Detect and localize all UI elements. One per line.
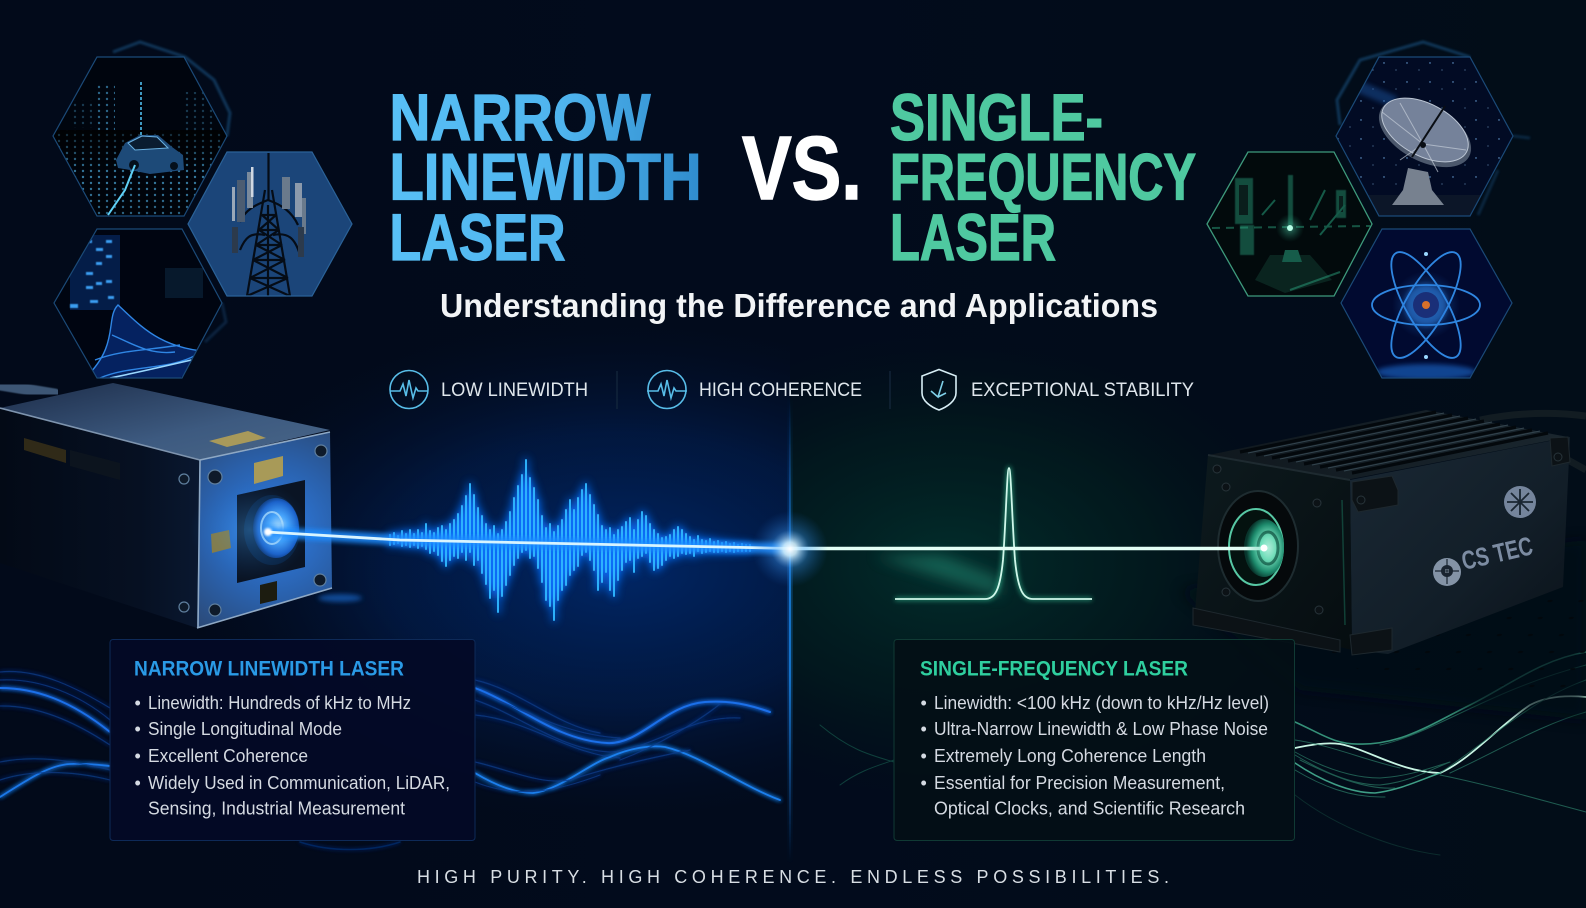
- panel bullet list: Widely Used in Communication, LiDAR,: [148, 773, 450, 793]
- panel bullet list: •: [920, 773, 927, 793]
- title: narrow linewidth laser: LINEWIDTH: [390, 140, 702, 214]
- title: single-frequency laser: LASER: [890, 200, 1056, 274]
- chip: exceptional stability: EXCEPTIONAL STABILITY: [971, 379, 1194, 401]
- panel: single-frequency laser: [894, 640, 1294, 840]
- hexagon: radio telescope: [1334, 55, 1516, 220]
- cable: [0, 385, 55, 394]
- lens: [244, 495, 300, 565]
- green beam: [790, 542, 1264, 555]
- icon: pulse in circle: [390, 370, 428, 408]
- corner blocks: [1193, 437, 1570, 655]
- chart: single-frequency green peak: [874, 468, 1092, 599]
- hexagon cluster: left applications: [50, 42, 354, 380]
- title: narrow linewidth laser: LASER: [390, 200, 566, 274]
- title: narrow linewidth laser: [390, 80, 702, 274]
- title: narrow linewidth laser: NARROW: [390, 80, 651, 154]
- panel bullet list: Excellent Coherence: [148, 746, 308, 766]
- panel bullet list: •: [134, 746, 141, 766]
- right green wave ribbons: [820, 652, 1586, 855]
- hexagon: telecom tower: [186, 150, 354, 298]
- subtitle: Understanding the Difference and Applications: [440, 287, 1158, 324]
- panel bullet list: Sensing, Industrial Measurement: [148, 798, 405, 818]
- footer tagline: HIGH PURITY. HIGH COHERENCE. ENDLESS POSSIBILITIES.: [417, 867, 1169, 887]
- title: single-frequency laser: FREQUENCY: [890, 140, 1196, 214]
- glow outline behind right hexagons: [1337, 42, 1530, 215]
- title: single-frequency laser: [890, 80, 1196, 274]
- panel bullet list: •: [134, 773, 141, 793]
- centre flare: [752, 511, 828, 587]
- front face: [197, 432, 332, 628]
- centre vertical light line: [788, 395, 792, 865]
- rear cable: [1480, 413, 1586, 470]
- panel heading: SINGLE-FREQUENCY LASER: [920, 656, 1188, 680]
- panel bullet list: •: [920, 746, 927, 766]
- device: right green laser module: [1180, 410, 1586, 720]
- front labels: [254, 456, 283, 484]
- left blue wave ribbons: [0, 672, 780, 850]
- panel: narrow linewidth laser: [110, 640, 475, 840]
- panel bullet list: Optical Clocks, and Scientific Research: [934, 798, 1245, 818]
- panel bullet list: •: [134, 719, 141, 739]
- panel bullet list: Extremely Long Coherence Length: [934, 746, 1206, 766]
- panel bullet list: Essential for Precision Measurement,: [934, 773, 1225, 793]
- lens assembly: [1218, 491, 1298, 601]
- bolts: [1213, 453, 1562, 614]
- chip: high coherence: [647, 370, 862, 408]
- panel bullet list: Linewidth: <100 kHz (down to kHz/Hz level): [934, 693, 1269, 713]
- chip: low linewidth: LOW LINEWIDTH: [441, 379, 588, 401]
- icon: shield with check: [922, 370, 956, 410]
- blue beam: [267, 532, 790, 548]
- panel bullet list: Ultra-Narrow Linewidth & Low Phase Noise: [934, 719, 1268, 739]
- top heatsink face: [1209, 410, 1568, 480]
- hexagon: fibre data center: [55, 230, 222, 378]
- front face: [1195, 455, 1352, 650]
- side face: [0, 408, 200, 628]
- brand logo: CS TEC: [1433, 486, 1536, 586]
- chart: noisy blue waveform: [390, 460, 750, 620]
- panel heading: NARROW LINEWIDTH LASER: [134, 656, 404, 680]
- laser beams: [264, 511, 1282, 587]
- panel bullet list: Linewidth: Hundreds of kHz to MHz: [148, 693, 411, 713]
- feature chips row: [390, 370, 1194, 410]
- panel bullet list: •: [920, 693, 927, 713]
- right side face: [1350, 437, 1570, 654]
- hexagon: optics lab: [1205, 150, 1375, 298]
- title: single-frequency laser: SINGLE-: [890, 80, 1103, 154]
- top face: [0, 383, 330, 460]
- icon: pulse in circle: [647, 370, 687, 408]
- brand logo: CS TEC: CS TEC: [1459, 530, 1536, 576]
- hexagon: LiDAR car: [50, 55, 230, 220]
- hexagon cluster: right applications: [1205, 42, 1530, 381]
- lens plate: [237, 480, 305, 583]
- panel bullet list: [920, 693, 1269, 818]
- screws: [179, 445, 327, 616]
- chip: low linewidth: [390, 370, 588, 408]
- table surface: [1180, 540, 1586, 720]
- panel bullet list: •: [134, 693, 141, 713]
- panel bullet list: [134, 693, 450, 818]
- device: left blue laser module: [0, 383, 362, 628]
- chip: high coherence: HIGH COHERENCE: [699, 379, 862, 401]
- chip: exceptional stability: [922, 370, 1194, 410]
- lens flares: [1246, 530, 1282, 566]
- background: [250, 347, 1203, 792]
- glow outline behind left hexagons: [113, 42, 230, 342]
- hexagon: atom: [1338, 227, 1516, 381]
- panel bullet list: Single Longitudinal Mode: [148, 719, 342, 739]
- title: vs: VS.: [742, 119, 862, 219]
- panel bullet list: •: [920, 719, 927, 739]
